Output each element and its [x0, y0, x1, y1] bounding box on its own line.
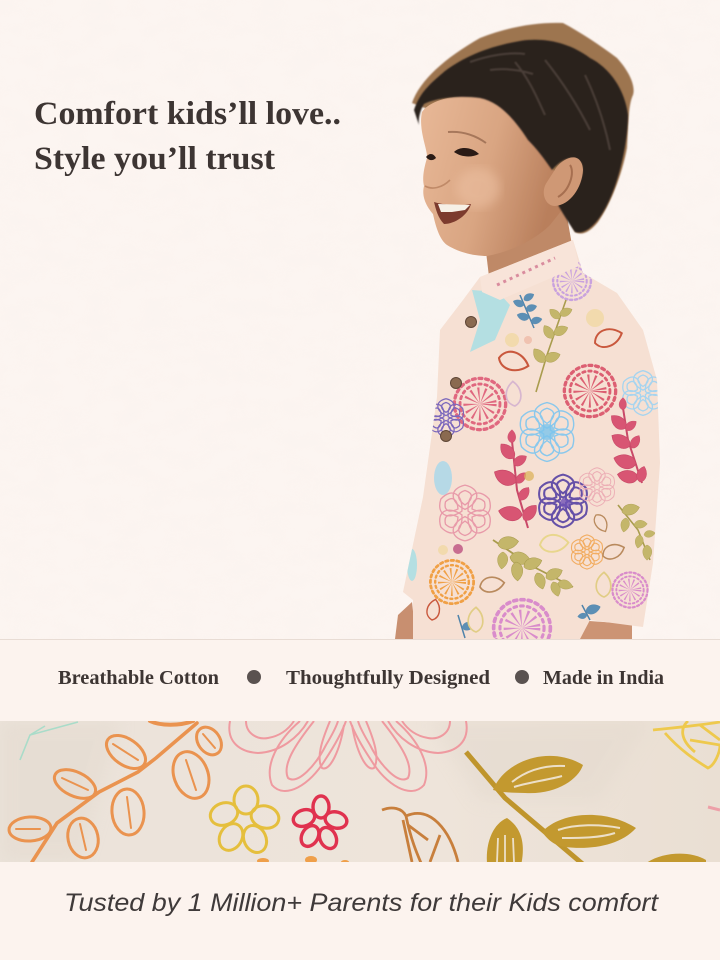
eyebrow: [448, 132, 486, 143]
hair highlights: [470, 53, 610, 150]
olive leaf base: [486, 818, 523, 862]
right hand: [568, 620, 632, 639]
bullet dot: [247, 670, 261, 684]
feature: Breathable Cotton: Breathable Cotton: [58, 667, 219, 689]
feature: Made in India: Made in India: [543, 667, 664, 689]
ear shade: [558, 165, 572, 197]
olive leaf base slits: [497, 835, 514, 862]
feature: Thoughtfully Designed: Thoughtfully Designed: [286, 667, 490, 689]
small dabs: [257, 856, 349, 862]
collar print: [497, 258, 555, 285]
bullet dot 2: [515, 670, 529, 684]
yellow flower: [207, 786, 281, 856]
divider line: [0, 639, 720, 640]
heading: Comfort kids’ll love..: [34, 96, 341, 132]
pale blossoms: [438, 309, 604, 555]
eye near: [454, 148, 479, 156]
petal flowers: [425, 371, 667, 569]
olive leaves: [466, 752, 706, 870]
hair dark mass: [414, 40, 628, 233]
fabric shading: [0, 721, 650, 862]
small outlined leaves: [426, 325, 626, 632]
hair back rim: [412, 23, 634, 234]
footer tagline: Tusted by 1 Million+ Parents for their Kids comfort: [64, 889, 659, 917]
fabric close-up strip: [0, 721, 720, 870]
left hand: [395, 602, 416, 639]
olive leaf lower: [542, 815, 636, 848]
dahlia flowers: [430, 262, 648, 656]
olive leaf corner: [648, 854, 706, 862]
blue leaf sprigs: [458, 291, 602, 638]
cheek highlight: [456, 168, 500, 208]
face: [421, 96, 566, 256]
pink dab right: [708, 807, 720, 810]
footer tagline: [0, 862, 720, 960]
heading: Style you’ll trust: [34, 141, 275, 177]
feature band: [0, 640, 720, 721]
page background: [0, 0, 720, 640]
cyan patches: [407, 290, 510, 581]
orange branch: [8, 721, 227, 862]
olive leaf upper: [493, 756, 583, 793]
yellow corner leaf: [653, 721, 720, 768]
pink outline flower: [229, 721, 467, 791]
brown leaf: [382, 808, 458, 870]
smile: [434, 202, 471, 224]
kurta body: [403, 240, 660, 639]
nose shade: [425, 180, 450, 188]
wooden buttons: [440, 316, 476, 442]
neck: [484, 205, 572, 285]
olive leaf branches: [493, 300, 656, 598]
kurta floral print: [407, 262, 667, 656]
teal sprig: [20, 722, 78, 760]
eye far: [426, 154, 436, 160]
teeth: [438, 204, 470, 212]
ear: [544, 157, 583, 206]
heading: [34, 96, 341, 177]
photo: smiling child in floral kurta: [395, 23, 667, 656]
olive leaf lower slits: [558, 825, 620, 838]
collar: [480, 240, 579, 300]
red leaf branches: [491, 398, 648, 528]
red flower: [291, 796, 349, 851]
olive leaf upper slits: [512, 766, 565, 787]
